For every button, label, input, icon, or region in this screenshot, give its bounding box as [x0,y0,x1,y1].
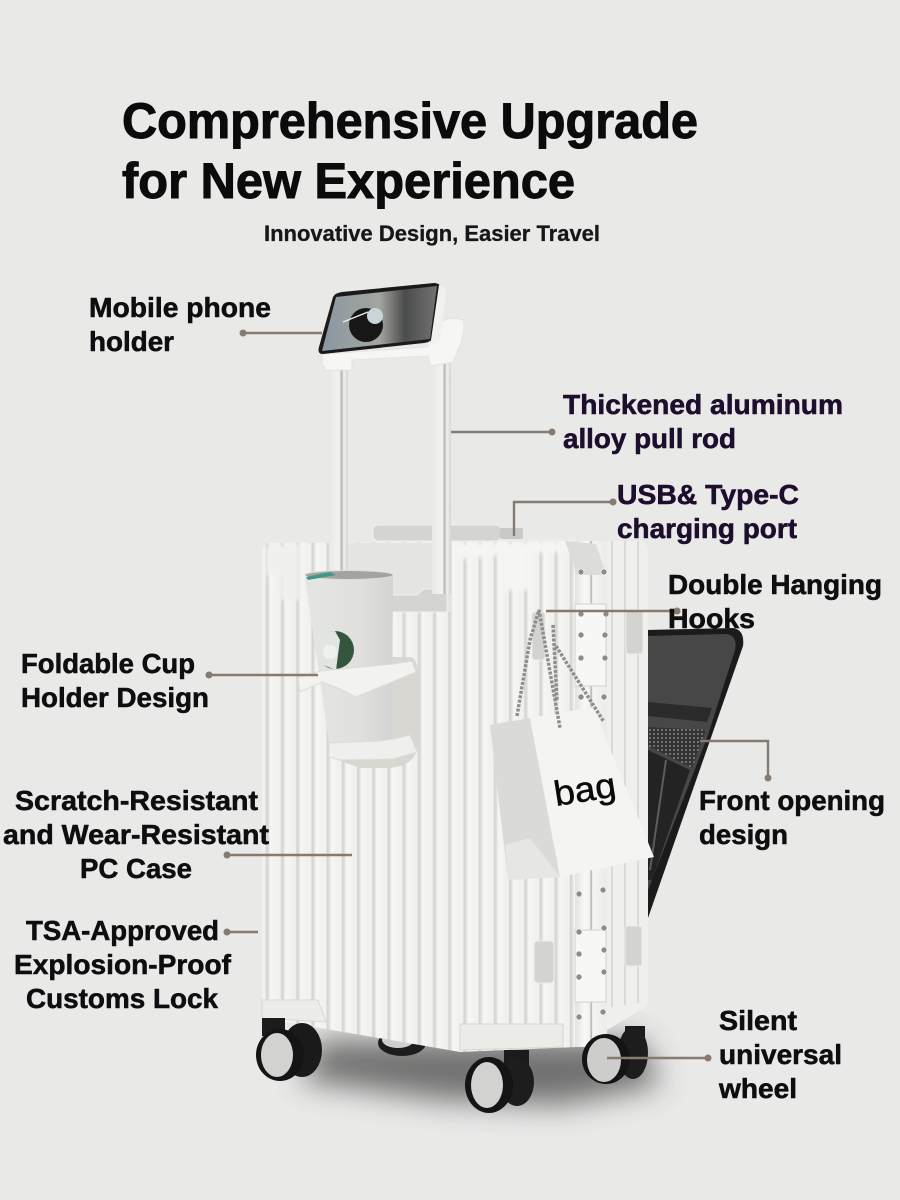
callout: TSA lock: TSA-Approved [26,915,219,946]
top carry handle and port [373,525,523,541]
rear wheel [378,1030,426,1056]
callout: TSA lock: Explosion-Proof [14,949,232,980]
wheel: right [582,1026,648,1084]
callout: hanging hooks [546,569,882,634]
callout: front opening: Front opening [699,785,885,816]
callout: silent wheel [607,1005,842,1104]
callout: cup holder: Holder Design [21,682,209,713]
wheel: front left [256,1018,322,1081]
callout: TSA lock: Customs Lock [26,983,218,1014]
callout: pull rod [451,389,843,454]
title: Comprehensive Upgrade [122,93,698,149]
bag handles [517,610,604,728]
callout: pull rod: alloy pull rod [563,423,736,454]
callout: mobile phone holder: holder [89,326,174,357]
paper bag [490,610,654,880]
subtitle: Innovative Design, Easier Travel [264,221,600,246]
wheels [256,1018,648,1113]
bottle cup with logo [305,570,393,750]
callout: hanging hooks: Double Hanging [668,569,882,600]
luggage product illustration [256,283,743,1113]
callout: charging port [514,479,799,544]
callout: cup holder [21,648,318,713]
callout: hanging hooks: Hooks [668,603,755,634]
callout: silent wheel: wheel [718,1073,797,1104]
floor shadow [300,1040,660,1105]
callout: TSA lock [14,915,258,1014]
callout: charging port: USB& Type-C [617,479,799,510]
title [122,93,698,209]
callout: cup holder: Foldable Cup [21,648,195,679]
title: for New Experience [122,153,575,209]
latches [532,610,643,983]
wheel: front centre [465,1050,534,1113]
callout: silent wheel: Silent [719,1005,797,1036]
aluminum frame and hinges [565,541,609,1047]
callout: mobile phone holder: Mobile phone [89,292,271,323]
phone holder handle [322,318,464,370]
open front lid [646,628,743,918]
callout: PC case: PC Case [80,853,192,884]
callout: pull rod: Thickened aluminum [563,389,843,420]
callout: PC case: and Wear-Resistant [3,819,269,850]
foldable cup holder [298,661,417,760]
telescopic pull rod [329,362,451,594]
cup holder recess [330,657,418,768]
callout: front opening [699,741,885,850]
callout: front opening: design [699,819,788,850]
callout: silent wheel: universal [719,1039,842,1070]
paper bag: bag [551,766,618,814]
suitcase body [262,541,648,1052]
callout: PC case [3,785,352,884]
callout: PC case: Scratch-Resistant [15,785,258,816]
phone [318,283,446,354]
top recess [345,543,452,612]
callout: mobile phone holder [89,292,322,357]
callout: charging port: charging port [617,513,797,544]
